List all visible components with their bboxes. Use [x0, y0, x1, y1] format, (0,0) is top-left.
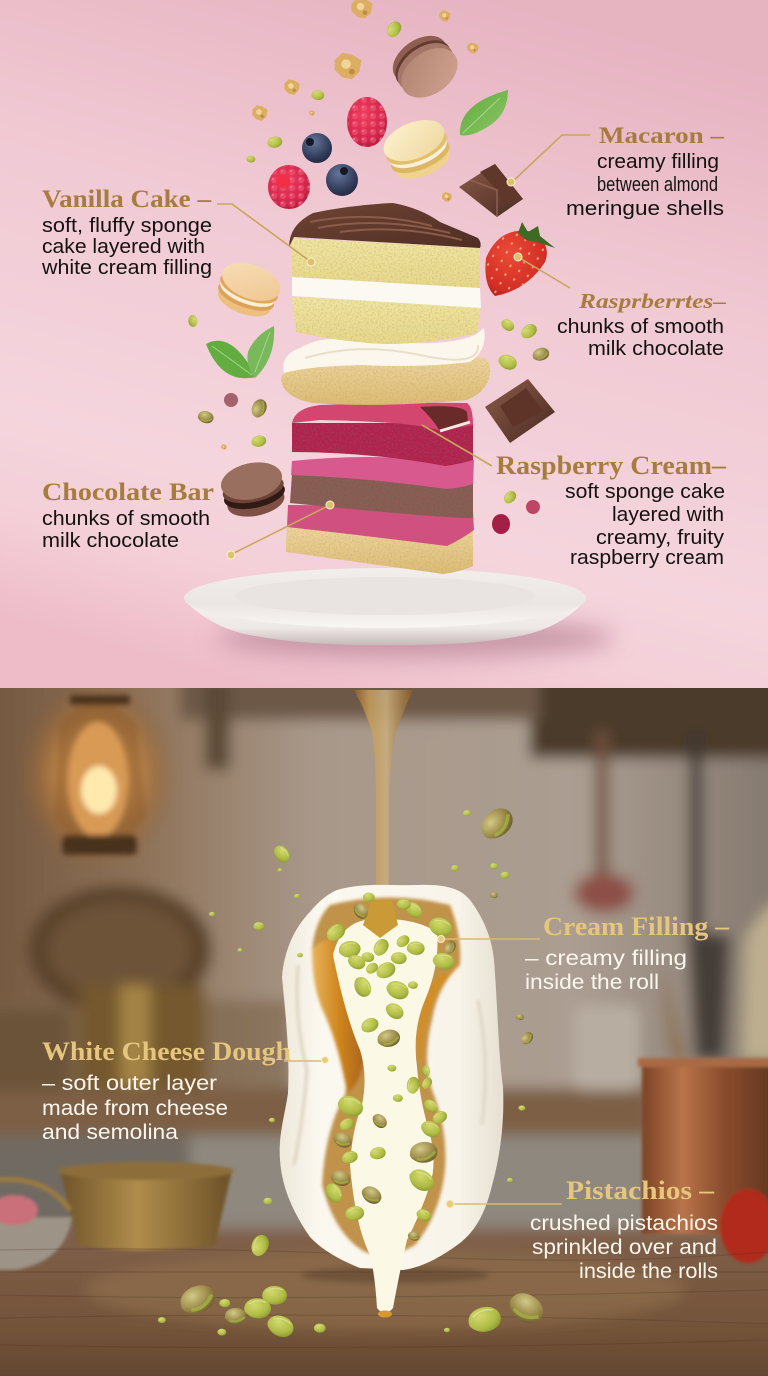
floating pistachios [187, 19, 551, 534]
label: chocolate bar: milk chocolate [42, 530, 179, 552]
leader lines and dots [284, 936, 562, 1208]
upper sponge 2 [292, 297, 481, 344]
white cream [292, 277, 481, 308]
label: raspberries [557, 289, 727, 360]
label: raspberry cream: raspberry cream [570, 547, 724, 569]
strawberry [485, 222, 555, 296]
cake crumbs [221, 0, 479, 450]
label: white cheese dough: – soft outer layer [42, 1072, 217, 1095]
panel: cheese roll [0, 640, 768, 1376]
label: cream filling [525, 912, 730, 994]
label: raspberry cream: soft sponge cake [565, 481, 725, 503]
label: macaron [566, 123, 725, 220]
label: raspberry cream: Raspberry Cream– [496, 451, 727, 480]
label: raspberry cream: layered with [612, 504, 724, 526]
label: macaron: between almond [597, 174, 718, 196]
label: cream filling: inside the roll [525, 971, 659, 994]
base sponge [281, 357, 490, 405]
label: raspberries: milk chocolate [588, 338, 724, 360]
mint leaf: top [460, 90, 508, 135]
label: raspberries: Rasprberrtes– [578, 289, 727, 313]
upper sponge 1 [292, 238, 480, 288]
honey pool [363, 900, 398, 938]
label: pistachios: inside the rolls [579, 1260, 718, 1283]
table grain [0, 1249, 768, 1348]
mint leaf: left [206, 326, 274, 378]
label: raspberries: chunks of smooth [557, 316, 724, 338]
copper pot and brass pot [0, 1058, 768, 1270]
label: raspberry cream [496, 451, 727, 569]
label: pistachios: sprinkled over and [532, 1236, 717, 1259]
panel: layered cake [0, 0, 768, 688]
cavity [312, 898, 460, 1255]
label: pistachios: Pistachios – [566, 1176, 715, 1205]
dough [280, 885, 503, 1270]
chocolate sponge [290, 474, 473, 518]
flying pistachio crumbs [209, 802, 535, 1258]
pistachios: bottom [322, 1165, 438, 1242]
plate [184, 568, 586, 645]
macaron: chocolate top [383, 26, 467, 108]
label: vanilla cake: Vanilla Cake – [42, 186, 212, 213]
chocolate piece: lower right [485, 379, 555, 443]
pistachios on table [158, 1280, 549, 1340]
label: vanilla cake [41, 186, 212, 279]
label: chocolate bar: Chocolate Bar [42, 479, 214, 506]
plate shadow [215, 618, 615, 658]
label: raspberry cream: creamy, fruity [596, 527, 724, 549]
white cheese roll [280, 885, 503, 1318]
lantern [18, 680, 178, 870]
red sponge [292, 423, 473, 466]
upper raspberry cream [291, 457, 474, 489]
label: chocolate bar [42, 479, 214, 552]
label: vanilla cake: cake layered with [42, 236, 205, 258]
label: macaron: meringue shells [566, 198, 724, 220]
leader lines and dots [217, 135, 590, 559]
label: white cheese dough [42, 1037, 292, 1144]
label: white cheese dough: White Cheese Dough [42, 1037, 292, 1066]
cake stack [281, 203, 490, 574]
label: pistachios: crushed pistachios [530, 1212, 718, 1235]
label: vanilla cake: soft, fluffy sponge [42, 215, 212, 237]
label: vanilla cake: white cream filling [41, 257, 212, 279]
raspberries and blueberries [268, 97, 387, 209]
cream frosting [283, 328, 485, 373]
label: macaron: Macaron – [599, 123, 725, 148]
label: white cheese dough: and semolina [42, 1121, 178, 1144]
label: cream filling: – creamy filling [525, 947, 687, 970]
pistachios: top cluster [323, 893, 457, 1050]
cream filling [333, 919, 438, 1313]
label: chocolate bar: chunks of smooth [42, 508, 210, 530]
bottom sponge [286, 527, 473, 574]
label: pistachios [530, 1176, 718, 1283]
macaron: chocolate side [217, 457, 289, 522]
kitchen background [0, 640, 768, 1376]
honey stream [354, 690, 413, 925]
roll shadow [300, 1267, 490, 1283]
chocolate top [289, 203, 481, 248]
label: macaron: creamy filling [597, 151, 719, 173]
label: white cheese dough: made from cheese [42, 1097, 228, 1120]
label: cream filling: Cream Filling – [543, 912, 730, 941]
pistachios: middle [331, 1065, 449, 1166]
raspberry mousse top [292, 403, 473, 431]
macaron: cream [378, 112, 458, 187]
chocolate piece: top right [459, 164, 523, 217]
lower raspberry cream [287, 505, 474, 546]
macaron: peach [211, 255, 286, 323]
